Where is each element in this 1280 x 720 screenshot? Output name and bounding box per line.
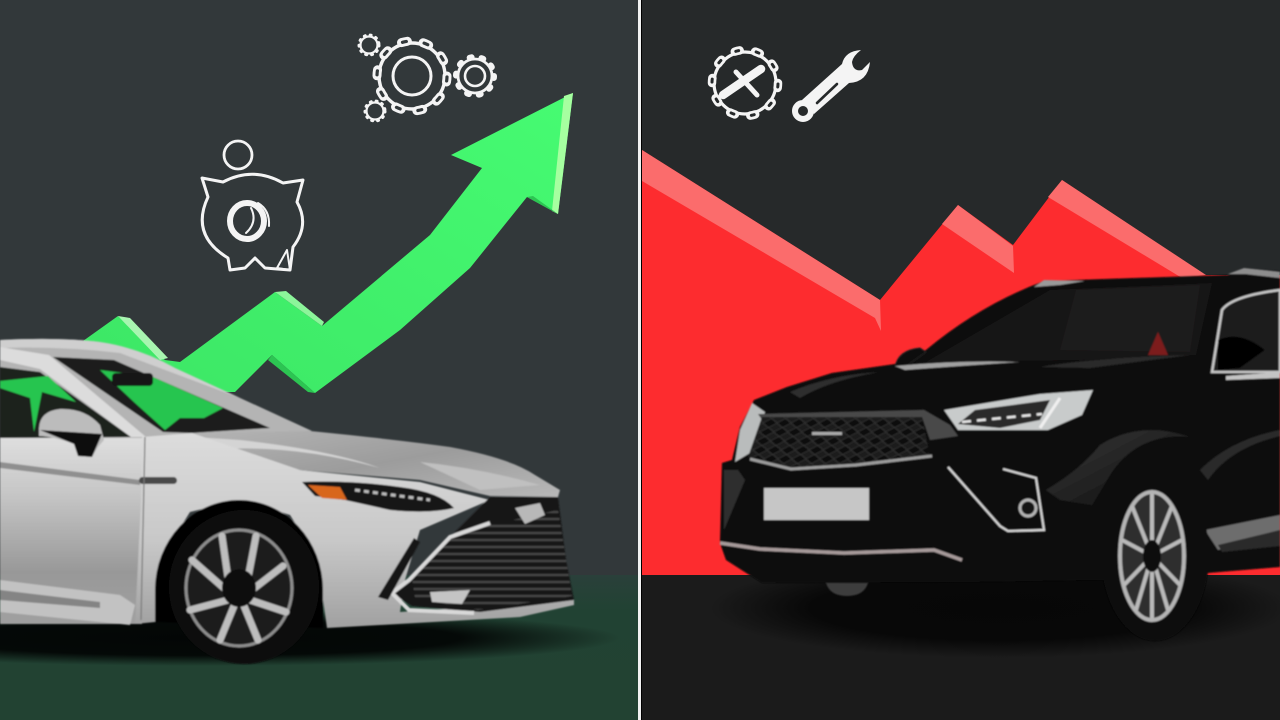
door panel <box>0 438 142 624</box>
sill <box>0 580 135 625</box>
left headlight sliver <box>735 403 765 462</box>
side sill chrome <box>1205 515 1280 550</box>
car: silver sedan <box>0 339 574 664</box>
icon: piggy bank with coin <box>202 141 303 270</box>
roof rail highlight <box>1034 280 1085 287</box>
fender highlights <box>1046 430 1190 505</box>
icon: gears <box>359 35 494 121</box>
panel: left background <box>0 0 638 720</box>
side window <box>1212 290 1280 372</box>
icon: wrench <box>795 50 870 119</box>
car: black suv <box>720 268 1280 641</box>
panel: right background <box>642 0 1280 720</box>
ground shadow: suv <box>710 558 1280 658</box>
grille chrome <box>750 456 932 469</box>
headlight <box>944 390 1093 430</box>
hood highlights <box>895 362 1020 370</box>
rim <box>186 530 292 646</box>
right gear <box>456 57 494 95</box>
a-pillar band <box>0 347 146 437</box>
grille <box>748 417 930 467</box>
fender and front bumper <box>135 433 574 628</box>
body silhouette <box>720 268 1280 583</box>
rim <box>1120 492 1184 620</box>
tire <box>169 510 319 664</box>
ground shadow: sedan <box>0 610 620 666</box>
fog lamp chrome trim <box>948 467 1044 531</box>
green seen through windshield <box>100 370 223 430</box>
center divider <box>638 0 641 720</box>
headlight <box>302 482 454 512</box>
corner chrome <box>724 470 745 530</box>
windshield <box>926 283 1212 362</box>
side window <box>0 367 131 438</box>
tire <box>1101 469 1209 641</box>
windshield <box>53 357 270 433</box>
grille <box>392 497 574 612</box>
wheel arch <box>155 500 323 628</box>
icon: gear with crossed tools <box>712 50 778 116</box>
grille frame <box>758 410 958 440</box>
chart: falling red zig-zag <box>642 150 1280 575</box>
door shut line <box>141 437 145 620</box>
side mirror near windshield <box>895 348 926 367</box>
roof and pillar <box>0 339 312 440</box>
main gear <box>377 41 447 111</box>
side badge <box>139 477 177 484</box>
mirror <box>39 409 104 457</box>
chrome grille accent <box>392 523 490 613</box>
hood <box>192 431 560 497</box>
small gears <box>359 35 385 121</box>
lower chrome lip <box>720 543 962 560</box>
far wheel <box>826 583 868 596</box>
license plate <box>764 488 869 520</box>
icon: green rising arrow <box>83 93 573 393</box>
